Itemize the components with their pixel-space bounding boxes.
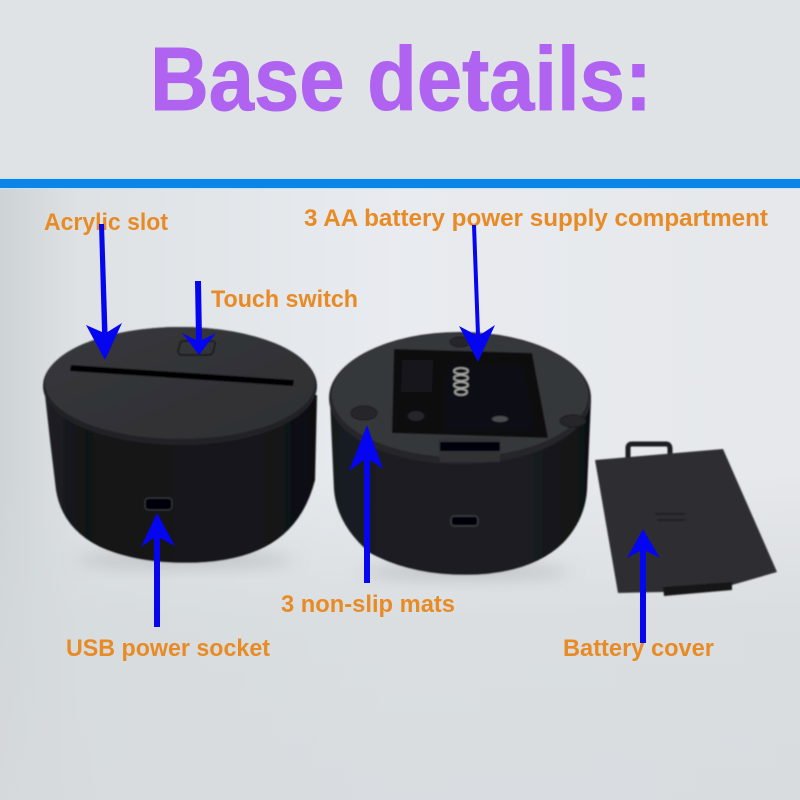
arrow: non-slip mats [349, 425, 383, 583]
left base [43, 327, 317, 567]
battery latch [438, 438, 500, 462]
right base [329, 332, 591, 579]
arrow: touch switch [182, 281, 216, 355]
title: Base details: [150, 30, 652, 130]
acrylic slot [70, 365, 294, 386]
photo background [0, 188, 800, 800]
spring contact [454, 368, 468, 395]
header background [0, 0, 800, 179]
battery compartment [392, 349, 548, 438]
label: touch switch: Touch switch [211, 286, 358, 313]
USB port right [451, 516, 478, 526]
label: battery cover: Battery cover [563, 635, 714, 662]
blue divider band [0, 178, 800, 189]
label: USB power socket: USB power socket [66, 635, 270, 662]
USB port left [145, 498, 172, 510]
touch switch [178, 341, 215, 355]
non-slip mats [351, 337, 586, 427]
label: acrylic slot: Acrylic slot [44, 209, 168, 236]
label: non-slip mats: 3 non-slip mats [281, 591, 455, 618]
arrow: USB socket [141, 513, 175, 627]
arrow: battery cover [627, 529, 660, 643]
battery cover [595, 444, 777, 596]
arrow: battery compartment [459, 225, 495, 362]
label: battery compartment: 3 AA battery power supply compartment [304, 205, 768, 232]
arrow: acrylic slot [86, 224, 122, 360]
